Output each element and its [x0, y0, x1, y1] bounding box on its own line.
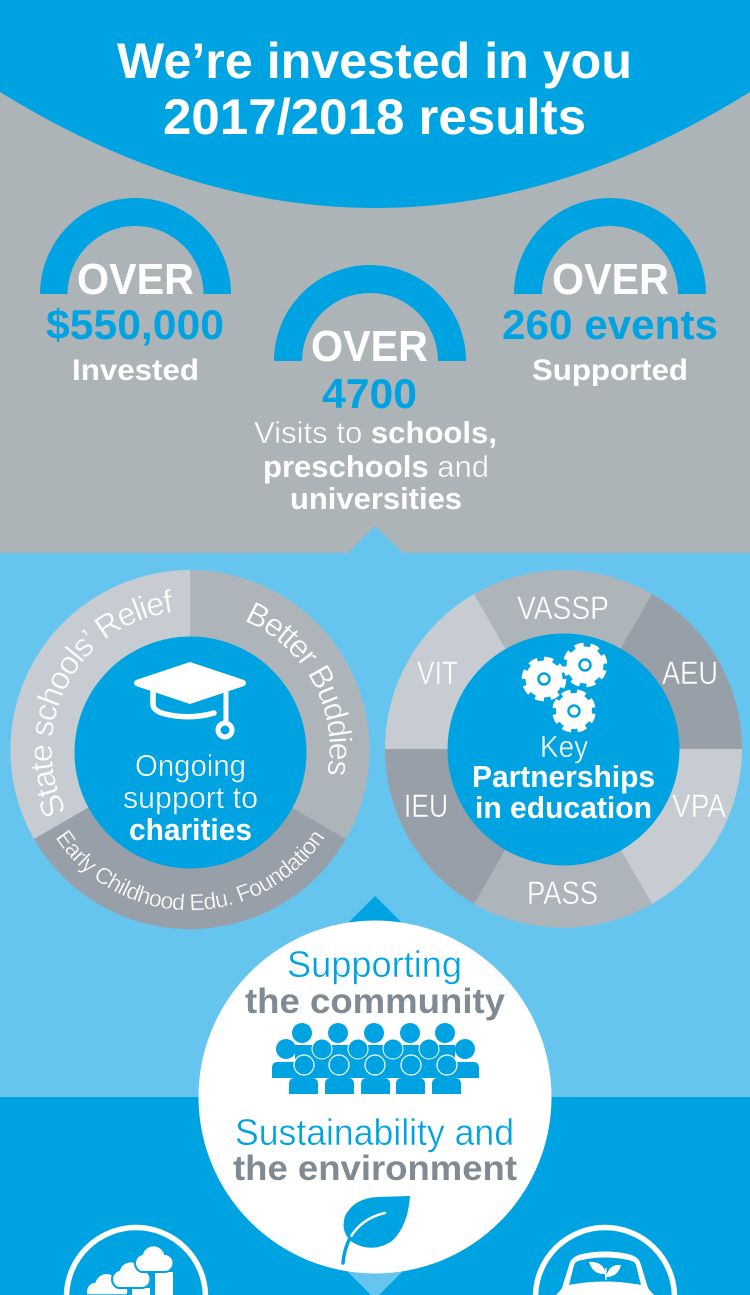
segment: Better Buddies [190, 570, 370, 839]
segment: VIT [385, 594, 563, 749]
panel: sky blue partnerships background [0, 553, 750, 1097]
icon: factory clouds in ring [67, 1228, 205, 1295]
text: key partnerships in education: Partnerships [472, 759, 655, 794]
stat: over 4700 visits: universities [290, 481, 462, 516]
label: Early Childhood Edu. Foundation: Early Childhood Edu. Foundation [56, 830, 324, 910]
text: key partnerships in education [472, 729, 655, 825]
heading: sustainability and the environment: Sustainability and [235, 1112, 514, 1153]
cloud: middle [112, 1261, 150, 1288]
panel: community and environment disc [198, 920, 552, 1274]
title [117, 33, 632, 145]
segment: VASSP [474, 570, 652, 749]
stat: over 4700 visits: Visits to schools, [254, 415, 497, 450]
panel: blue environment background [0, 1097, 750, 1295]
stat: over $550,000 invested: OVER [77, 255, 194, 304]
text: ongoing support to charities: Ongoing [135, 748, 246, 783]
label: Better Buddies: Better Buddies [246, 602, 352, 775]
segment labels: VIT [417, 655, 458, 691]
label: State Schools' Relief: State schools’ Relief [32, 589, 172, 816]
segment labels: AEU [662, 655, 718, 691]
heading: sustainability and the environment [233, 1112, 517, 1188]
panel: charities ring [10, 570, 370, 930]
segment: State Schools' Relief [10, 570, 190, 839]
text: key partnerships in education: in education [475, 790, 652, 825]
segment: AEU [563, 594, 742, 749]
stat: over 260 events supported: OVER [552, 255, 669, 304]
heading: supporting the community [245, 944, 506, 1021]
panel: grey results background [0, 0, 750, 553]
segment labels: VASSP [517, 590, 609, 626]
text: key partnerships in education: Key [540, 729, 588, 764]
stat: over 260 events supported: 260 events [502, 301, 718, 348]
header curved banner [0, 0, 750, 208]
stat: over $550,000 invested [40, 198, 231, 387]
arrow: blue triangle above community disc [345, 896, 405, 926]
stat: over $550,000 invested: Invested [72, 354, 199, 387]
segment labels: VPA [672, 788, 727, 824]
text: ongoing support to charities: support to [123, 780, 258, 815]
panel: partnerships ring [385, 570, 742, 928]
stat: over $550,000 invested: $550,000 [46, 301, 224, 348]
segment: VPA [563, 749, 742, 904]
cloud: low [86, 1273, 128, 1295]
segment labels: IEU [404, 788, 448, 824]
sprout [589, 1262, 621, 1280]
icon: graduation cap [134, 662, 246, 737]
car body [556, 1252, 654, 1295]
stat: over 4700 visits: 4700 [322, 370, 417, 417]
centre disc [448, 634, 680, 866]
segment labels: PASS [527, 875, 598, 911]
stat: over 4700 visits: OVER [311, 322, 428, 371]
heading: sustainability and the environment: the environment [233, 1149, 517, 1188]
stat: over 4700 visits: preschools and [263, 449, 489, 484]
icon: leaf [343, 1196, 410, 1263]
text: ongoing support to charities: charities [129, 812, 252, 847]
arrow: sky triangle below community disc [346, 1270, 404, 1295]
segment labels [404, 590, 727, 911]
windscreen [569, 1258, 641, 1285]
stat: over 4700 visits [254, 265, 497, 516]
heading: supporting the community: Supporting [287, 944, 462, 985]
chimneys [132, 1272, 173, 1295]
segment: Early Childhood Education Foundation [34, 749, 346, 929]
arrow: up to grey panel [348, 526, 403, 553]
segment: PASS [474, 749, 652, 928]
icon: eco car in ring [536, 1228, 674, 1295]
title: We’re invested in you [117, 33, 632, 89]
stat: over 260 events supported: Supported [532, 354, 688, 387]
icon: gears [524, 641, 609, 733]
text: ongoing support to charities [123, 748, 258, 847]
heading: supporting the community: the community [245, 982, 506, 1021]
segment: IEU [385, 749, 563, 904]
centre disc [74, 636, 306, 868]
cloud: high [135, 1245, 173, 1272]
stat: over 260 events supported [502, 198, 718, 387]
icon: crowd of people [272, 1023, 479, 1094]
title: 2017/2018 results [163, 89, 586, 145]
